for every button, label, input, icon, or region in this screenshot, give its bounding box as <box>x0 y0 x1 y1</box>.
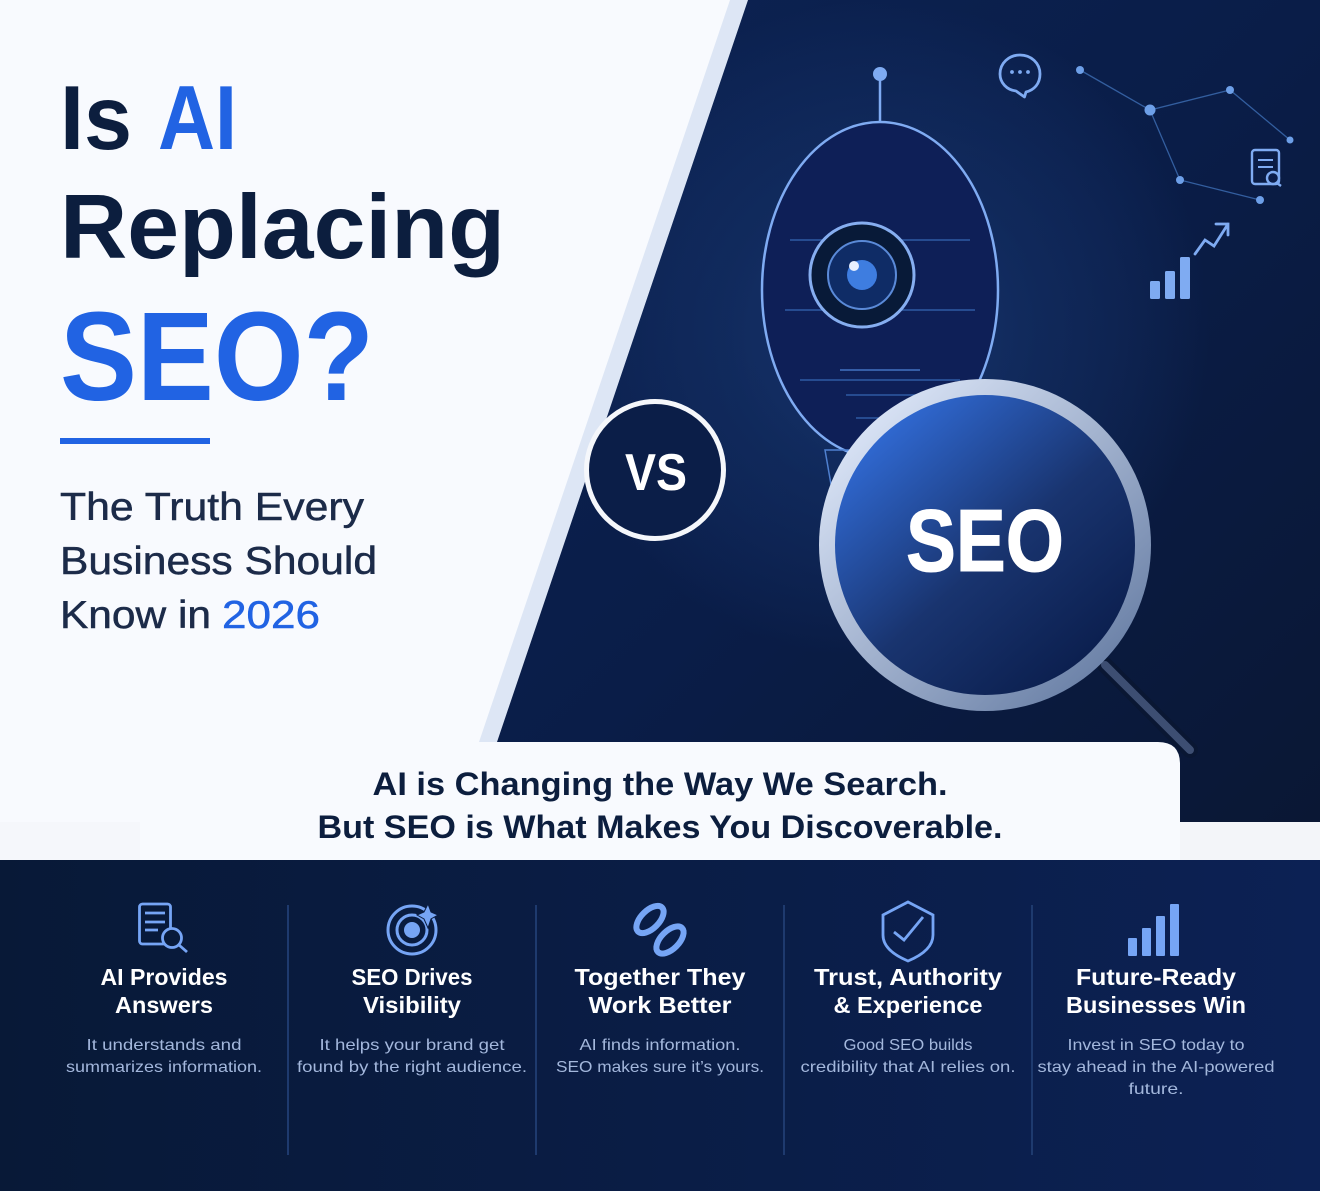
feature: AI Provides Answers: It understands and <box>86 1037 242 1054</box>
feature: SEO Drives Visibility: found by the right audience. <box>297 1059 527 1076</box>
magnifier handle <box>1105 665 1190 750</box>
icon: document search small <box>1252 150 1281 186</box>
banner text <box>318 766 1003 845</box>
icon: bars <box>1128 904 1179 956</box>
accent rule <box>60 438 210 444</box>
banner card <box>140 742 1180 860</box>
feature: SEO Drives Visibility: Visibility <box>363 992 461 1018</box>
magnifier ring <box>819 379 1151 711</box>
subtitle <box>60 486 377 637</box>
magnifying glass <box>819 379 1190 750</box>
feature: Trust, Authority & Experience <box>800 902 1016 1076</box>
feature: Trust, Authority & Experience: credibility that AI relies on. <box>800 1059 1016 1076</box>
title line: Is AI <box>60 68 237 169</box>
icon: growth chart small <box>1150 224 1228 299</box>
feature: Together They Work Better: SEO makes sure it’s yours. <box>556 1059 764 1076</box>
feature: Trust, Authority & Experience: & Experience <box>834 992 982 1018</box>
title line: Replacing: Replacing <box>60 177 505 278</box>
subtitle: 2026 <box>222 594 320 637</box>
banner text: But SEO is What Makes You Discoverable. <box>318 809 1003 845</box>
feature: Together They Work Better: Work Better <box>588 992 732 1018</box>
feature: Trust, Authority & Experience: Trust, Authority <box>814 964 1002 990</box>
feature: AI Provides Answers: Answers <box>115 992 213 1018</box>
panel: dark hero background <box>479 0 1320 822</box>
magnifier lens <box>835 395 1135 695</box>
robot head <box>762 122 998 458</box>
subtitle: Know in <box>60 594 211 637</box>
panel: bottom features <box>0 860 1320 1191</box>
icon: linked rings <box>632 901 688 958</box>
feature: SEO Drives Visibility: SEO Drives <box>352 964 472 990</box>
feature: AI Provides Answers: AI Provides <box>100 964 228 990</box>
icon: shield check <box>883 902 933 961</box>
scan lines <box>785 240 975 418</box>
title <box>60 68 505 427</box>
robot eye <box>810 223 914 327</box>
feature: Together They Work Better: AI finds information. <box>580 1037 740 1054</box>
constellation network <box>1076 66 1294 204</box>
feature: Future-Ready Businesses Win: Businesses Win <box>1066 992 1246 1018</box>
robot illustration <box>762 67 998 490</box>
icon: document search <box>140 904 187 952</box>
feature: AI Provides Answers <box>66 904 262 1076</box>
feature: AI Provides Answers: summarizes information. <box>66 1059 262 1076</box>
subtitle: The Truth Every <box>60 486 365 529</box>
title line: Is AI: Is <box>60 68 132 169</box>
lens label: SEO <box>906 491 1064 590</box>
subtitle: Business Should <box>60 540 377 583</box>
feature: Together They Work Better <box>556 901 764 1076</box>
VS badge: VS <box>625 444 687 502</box>
feature: Future-Ready Businesses Win: stay ahead in the AI-powered <box>1038 1059 1274 1076</box>
feature: Future-Ready Businesses Win: future. <box>1128 1081 1184 1098</box>
strip behind banner <box>0 822 1320 860</box>
banner text: AI is Changing the Way We Search. <box>372 766 948 802</box>
title line: Is AI: AI <box>158 68 237 169</box>
feature: SEO Drives Visibility <box>297 904 527 1076</box>
robot neck <box>825 450 850 490</box>
feature: Trust, Authority & Experience: Good SEO builds <box>844 1037 972 1054</box>
feature: Future-Ready Businesses Win: Future-Ready <box>1076 964 1236 990</box>
feature: Together They Work Better: Together They <box>574 964 746 990</box>
icon: chat bubble <box>1000 55 1040 97</box>
feature: Future-Ready Businesses Win: Invest in SEO today to <box>1068 1037 1245 1054</box>
icon: target <box>388 904 438 954</box>
title line: SEO?: SEO? <box>60 286 374 427</box>
VS badge <box>586 402 724 538</box>
feature: Future-Ready Businesses Win <box>1038 904 1274 1098</box>
robot antenna <box>873 67 887 122</box>
feature: SEO Drives Visibility: It helps your brand get <box>320 1037 505 1054</box>
